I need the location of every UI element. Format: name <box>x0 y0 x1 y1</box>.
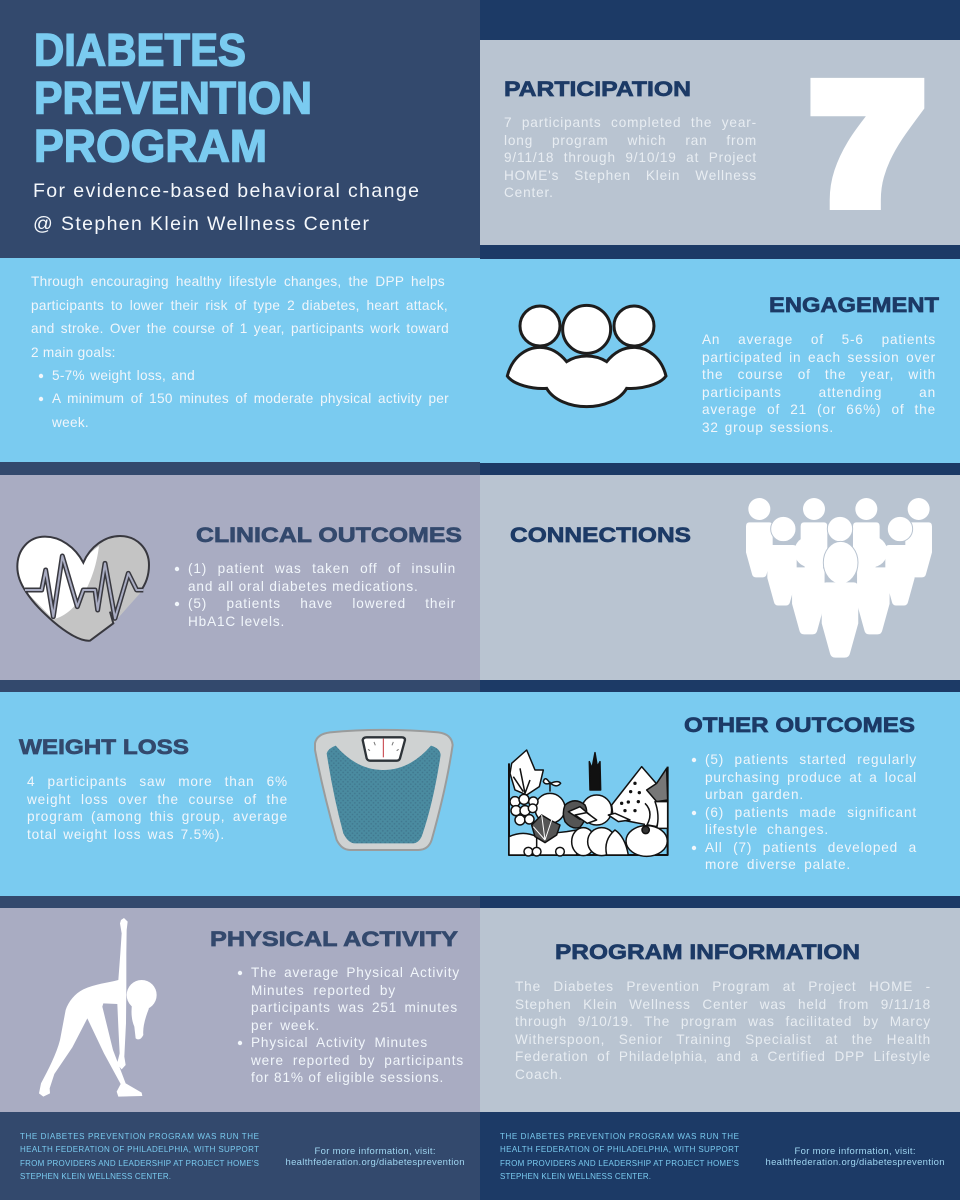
text: participation: 9/11/18 through 9/10/19 at Project <box>504 150 757 165</box>
panel: engagement <box>480 259 960 463</box>
heading: weight loss: WEIGHT LOSS <box>19 735 189 759</box>
text: engagement: the course of the year, with <box>702 367 936 382</box>
text: engagement: An average of 5-6 patients <box>702 332 936 347</box>
text: introduction: week. <box>52 415 89 430</box>
text: physical activity <box>238 964 476 1094</box>
text: program information <box>515 978 945 1088</box>
text: other outcomes: lifestyle changes. <box>705 822 829 837</box>
text: weight loss: program (among this group, average <box>27 809 288 824</box>
text: program information: Federation of Philadelphia, and a Certified DPP Lifestyle <box>515 1049 931 1064</box>
footer link: healthfederation.org/diabetesprevention <box>766 1157 944 1168</box>
text: introduction: and stroke. Over the course of 1 year, participants work toward <box>31 321 449 336</box>
text: introduction: A minimum of 150 minutes of moderate physical activity per <box>52 391 449 406</box>
text: physical activity: were reported by participants <box>251 1053 464 1068</box>
text: program information: The Diabetes Prevention Program at Project HOME - <box>515 979 931 994</box>
footer credit text: STEPHEN KLEIN WELLNESS CENTER. <box>20 1172 171 1181</box>
text: participation: HOME's Stephen Klein Wellness <box>504 168 757 183</box>
text: clinical outcomes: and all oral diabetes medications. <box>188 579 419 594</box>
panel: other outcomes <box>480 692 960 896</box>
subtitle: For evidence-based behavioral change <box>33 180 419 202</box>
text: physical activity: per week. <box>251 1018 320 1033</box>
text: participation: 7 participants completed the year- <box>504 115 757 130</box>
text: participation: Center. <box>504 185 554 200</box>
subtitle: @ Stephen Klein Wellness Center <box>33 213 370 235</box>
footer credit text: FROM PROVIDERS AND LEADERSHIP AT PROJECT HOME'S <box>500 1159 739 1168</box>
footer credit text: FROM PROVIDERS AND LEADERSHIP AT PROJECT HOME'S <box>20 1159 259 1168</box>
text: other outcomes <box>692 751 940 881</box>
icon: person stretching <box>39 918 157 1097</box>
panel: title <box>33 24 419 235</box>
text: physical activity: Physical Activity Minutes <box>251 1035 428 1050</box>
text: introduction: 5-7% weight loss, and <box>52 368 195 383</box>
text: engagement: participants attending an <box>702 385 936 400</box>
panel: participation <box>480 40 960 245</box>
subtitle <box>33 180 419 235</box>
icon: bathroom scale <box>315 730 453 850</box>
footer credit text <box>500 1132 739 1181</box>
text: clinical outcomes <box>175 560 468 635</box>
text: engagement: participated in each session over <box>702 350 936 365</box>
text: physical activity: for 81% of eligible sessions. <box>251 1070 444 1085</box>
text: weight loss: total weight loss was 7.5%). <box>27 827 225 842</box>
text: weight loss: 4 participants saw more than 6% <box>27 774 288 789</box>
text: engagement: average of 21 (or 66%) of the <box>702 402 936 417</box>
text: physical activity: Minutes reported by <box>251 983 396 998</box>
footer credit text: HEALTH FEDERATION OF PHILADELPHIA, WITH SUPPORT <box>20 1145 259 1154</box>
footer credit text: THE DIABETES PREVENTION PROGRAM WAS RUN THE <box>500 1132 739 1141</box>
footer link: For more information, visit: <box>794 1146 916 1157</box>
heading: program title: DIABETES <box>34 24 246 76</box>
text: introduction: participants to lower their risk of type 2 diabetes, heart attack, <box>31 298 448 313</box>
text: program information: through 9/10/19. The program was facilitated by Marcy <box>515 1014 931 1029</box>
icon: heart with pulse line <box>17 536 149 641</box>
footer: right <box>500 1132 944 1181</box>
footer link: healthfederation.org/diabetesprevention <box>286 1157 464 1168</box>
text: program information: Witherspoon, Senior Training Specialist at the Health <box>515 1032 931 1047</box>
text: weight loss <box>27 773 307 848</box>
heading: other outcomes: OTHER OUTCOMES <box>684 713 915 737</box>
heading: engagement: ENGAGEMENT <box>769 293 939 317</box>
icon: group of people <box>746 498 932 658</box>
text: weight loss: weight loss over the course of the <box>27 792 288 807</box>
text: clinical outcomes: (5) patients have lowered their <box>188 596 456 611</box>
text: engagement <box>702 331 952 441</box>
text: program information: Stephen Klein Wellness Center was held from 9/11/18 <box>515 997 931 1012</box>
text: clinical outcomes: HbA1C levels. <box>188 614 285 629</box>
heading: program title <box>34 24 312 172</box>
footer credit text <box>20 1132 259 1181</box>
text: other outcomes: (6) patients made significant <box>705 805 917 820</box>
footer credit text: STEPHEN KLEIN WELLNESS CENTER. <box>500 1172 651 1181</box>
heading: program title: PREVENTION <box>34 72 312 124</box>
heading: clinical outcomes: CLINICAL OUTCOMES <box>196 523 462 547</box>
text: introduction <box>31 270 461 440</box>
panel: weight loss <box>0 692 480 896</box>
text: engagement: 32 group sessions. <box>702 420 834 435</box>
heading: program information: PROGRAM INFORMATION <box>555 940 860 964</box>
text: physical activity: The average Physical Activity <box>251 965 460 980</box>
text: other outcomes: more diverse palate. <box>705 857 851 872</box>
heading: program title: PROGRAM <box>34 120 267 172</box>
footer: left <box>20 1132 464 1181</box>
footer link: For more information, visit: <box>314 1146 436 1157</box>
heading: physical activity: PHYSICAL ACTIVITY <box>210 927 458 951</box>
footer link <box>766 1146 944 1168</box>
panel: clinical outcomes <box>0 475 480 680</box>
text: program information: Coach. <box>515 1067 563 1082</box>
panel: introduction <box>0 258 480 462</box>
icon: three people <box>507 305 666 407</box>
text: participation: long program which ran from <box>504 133 757 148</box>
text: introduction: Through encouraging healthy lifestyle changes, the DPP helps <box>31 274 445 289</box>
text: other outcomes: purchasing produce at a local <box>705 770 917 785</box>
panel: connections <box>480 475 960 680</box>
heading: connections: CONNECTIONS <box>510 523 691 547</box>
text: participation <box>504 114 774 204</box>
text: other outcomes: (5) patients started regularly <box>705 752 917 767</box>
footer credit text: HEALTH FEDERATION OF PHILADELPHIA, WITH SUPPORT <box>500 1145 739 1154</box>
panel: physical activity <box>0 908 480 1112</box>
text: clinical outcomes: (1) patient was taken off of insulin <box>188 561 456 576</box>
text: other outcomes: All (7) patients developed a <box>705 840 917 855</box>
panel: program information <box>480 908 960 1112</box>
footer credit text: THE DIABETES PREVENTION PROGRAM WAS RUN THE <box>20 1132 259 1141</box>
big number 7: 7 <box>814 53 921 235</box>
text: introduction: 2 main goals: <box>31 345 116 360</box>
heading: participation: PARTICIPATION <box>504 77 691 101</box>
text: other outcomes: urban garden. <box>705 787 804 802</box>
text: physical activity: participants was 251 minutes <box>251 1000 458 1015</box>
footer link <box>286 1146 464 1168</box>
icon: fruit and vegetables <box>509 750 668 856</box>
